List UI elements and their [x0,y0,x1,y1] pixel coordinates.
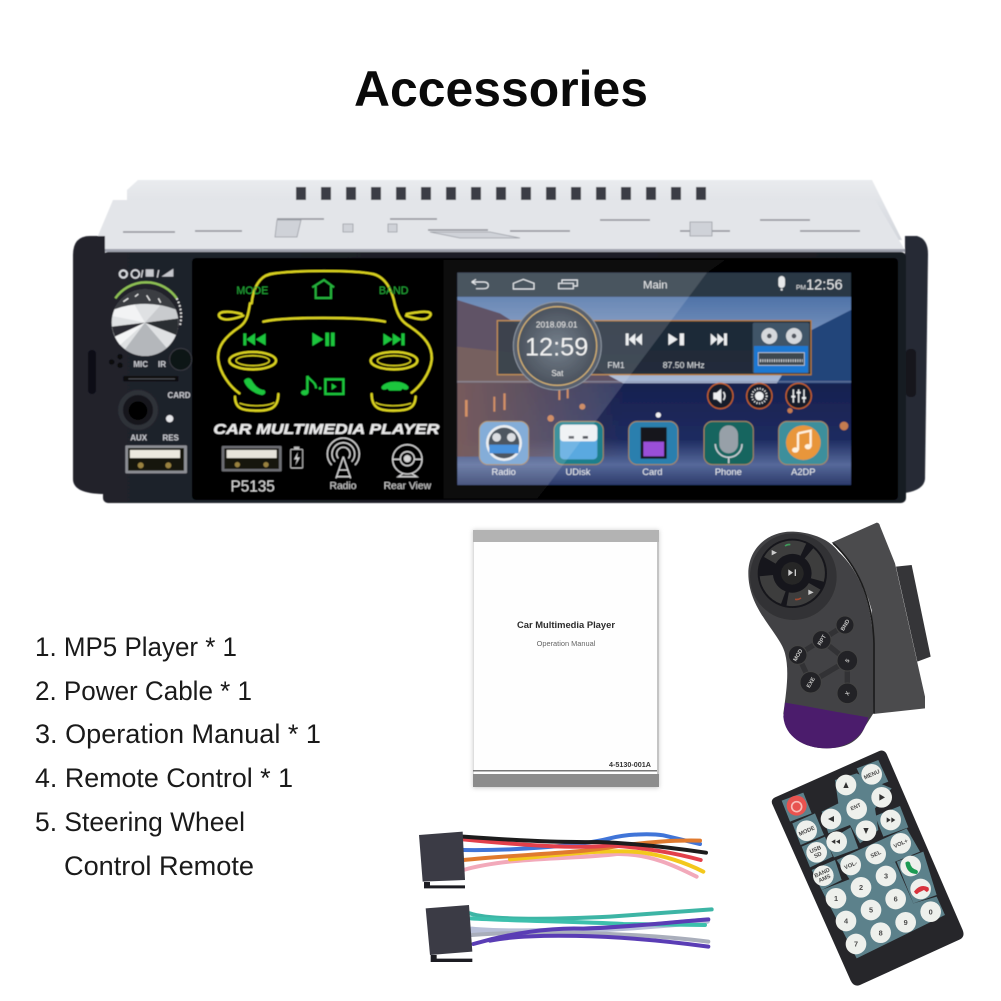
usb port left [125,445,187,473]
back icon [472,279,488,289]
side slot left [88,350,96,394]
front bezel [103,252,906,503]
power cable [419,832,712,962]
upper connector [419,832,465,888]
IR label: IR [158,360,166,369]
manual bottom band [473,770,659,787]
UDisk app: UDisk [566,467,591,477]
brand text: CAR MULTIMEDIA PLAYER [213,422,440,438]
media widget [497,302,811,390]
manual top band [473,530,659,542]
steering wheel remote [748,523,931,748]
body clamp seam [833,543,874,713]
hang up key icon [914,886,929,894]
right end cap [905,236,928,493]
button legends: EXE [806,676,817,689]
next icon [383,333,405,345]
teal key panels [782,760,945,958]
number legends: 9 [904,918,908,927]
item 3: 3. Operation Manual * 1 [35,719,321,749]
aux jack [118,390,158,430]
infrared remote control [772,751,964,986]
previous icon [243,333,266,345]
remote keys [796,764,941,954]
number legends: 7 [854,940,858,949]
previous button [626,333,642,345]
button groove [798,625,847,693]
MODE label: MODE [236,285,268,297]
manual part number: 4-5130-001A [609,760,651,769]
MIC label: MIC [133,360,148,369]
key legends: VOL- [844,860,859,871]
usb port right [222,446,282,471]
yellow car outline [218,271,432,411]
Phone app [704,421,753,477]
button legends: 5 [845,658,852,664]
FM label: FM1 [607,360,625,370]
home icon [513,279,534,289]
brightness round button [747,383,772,409]
RES label: RES [162,434,180,443]
key legends: MODE [798,825,816,838]
item 5 continued: Control Remote [64,851,254,881]
key legends: ENT [850,802,863,812]
key arrows [828,782,895,844]
lower connector [426,905,472,962]
volume round button [708,383,733,409]
wallpaper [457,273,851,485]
status icons: / [157,269,160,280]
button legends: BND [840,619,852,632]
radio tile [753,323,809,373]
recent icon [559,280,577,289]
operation manual [473,530,659,788]
key legends: VOL+ [893,838,910,850]
rear view label: Rear View [384,481,432,492]
battery icon [291,447,303,468]
mic dots [109,354,123,368]
call key icon [905,861,918,874]
left end cap [73,236,105,494]
number legends: 4 [844,917,849,926]
power key [787,796,807,816]
radio tower icon [327,438,359,478]
card slot [123,376,178,381]
title: Accessories [354,61,648,117]
button legends [793,619,852,697]
volume knob [111,282,181,356]
item 1: 1. MP5 Player * 1 [35,632,237,662]
number legends [834,872,933,949]
dial [750,533,837,620]
number legends: 6 [894,895,898,904]
key legends: SEL [870,850,883,860]
car stereo main unit [73,180,928,503]
next button [711,333,727,345]
clock dial: 12:59 [525,333,588,361]
number legends: 0 [929,907,933,916]
upper harness wires [463,834,706,877]
page dot [656,412,661,418]
number legends: 2 [859,883,863,892]
manual title: Car Multimedia Player [517,619,615,630]
left control panel [109,269,192,473]
key legends: AMS [818,874,832,884]
remote housing [772,751,964,986]
glass reflection [443,260,725,498]
call icon [244,378,265,395]
clock dial [513,302,601,390]
accessories list [35,632,321,881]
key legends: SD [813,851,823,860]
radio label: Radio [329,481,357,492]
small buttons [788,616,858,704]
car graphic touch panel [213,271,440,496]
clock: PM12:56 [796,278,843,294]
UDisk app [554,421,603,477]
BAND label: BAND [379,285,409,297]
strap [896,565,931,662]
equalizer round button [786,383,811,409]
lower harness wires [470,909,712,947]
number legends: 3 [884,872,888,881]
A2DP app [779,421,828,477]
purple light window [783,703,868,748]
key legends: MENU [863,769,881,781]
Card app [629,421,678,477]
key legends: BAND [814,867,831,880]
item 4: 4. Remote Control * 1 [35,763,293,793]
item 2: 2. Power Cable * 1 [35,676,252,706]
number legends: 5 [869,906,873,915]
status bar [457,273,851,297]
item 5: 5. Steering Wheel [35,807,245,837]
clock dial: Sat [551,369,564,378]
status icons [120,269,173,280]
button legends: MOD [793,648,804,663]
Phone app: Phone [715,467,742,477]
reset led [166,415,173,422]
hang up icon [382,382,408,391]
clamp [832,523,925,714]
media icon [301,376,343,395]
camera icon [393,445,422,477]
CARD label: CARD [167,391,191,400]
P5135 label: P5135 [231,479,275,496]
button legends: RPT [817,634,828,647]
A2DP app: A2DP [791,467,816,477]
home icon [312,280,334,298]
manual subtitle: Operation Manual [537,639,596,648]
key legends [798,769,910,884]
number legends: 8 [879,928,883,937]
IR sensor [170,348,192,370]
number legends: 1 [834,894,838,903]
play button [668,333,684,345]
AUX label: AUX [130,434,148,443]
screen title: Main [643,280,668,292]
side slot right [906,349,916,397]
status icons: / [141,269,144,280]
key legends: USB [809,845,822,855]
clock dial: 2018.09.01 [536,319,578,329]
remote body [748,532,873,748]
button legends: X [845,691,852,697]
Card app: Card [642,467,662,477]
radio app [479,421,529,477]
LCD screen [443,260,851,498]
frequency: 87.50 MHz [663,360,705,370]
mic icon [778,276,785,291]
play pause icon [312,333,335,346]
radio app: Radio [491,467,516,477]
black front glass [192,258,898,500]
chassis top [97,180,905,252]
